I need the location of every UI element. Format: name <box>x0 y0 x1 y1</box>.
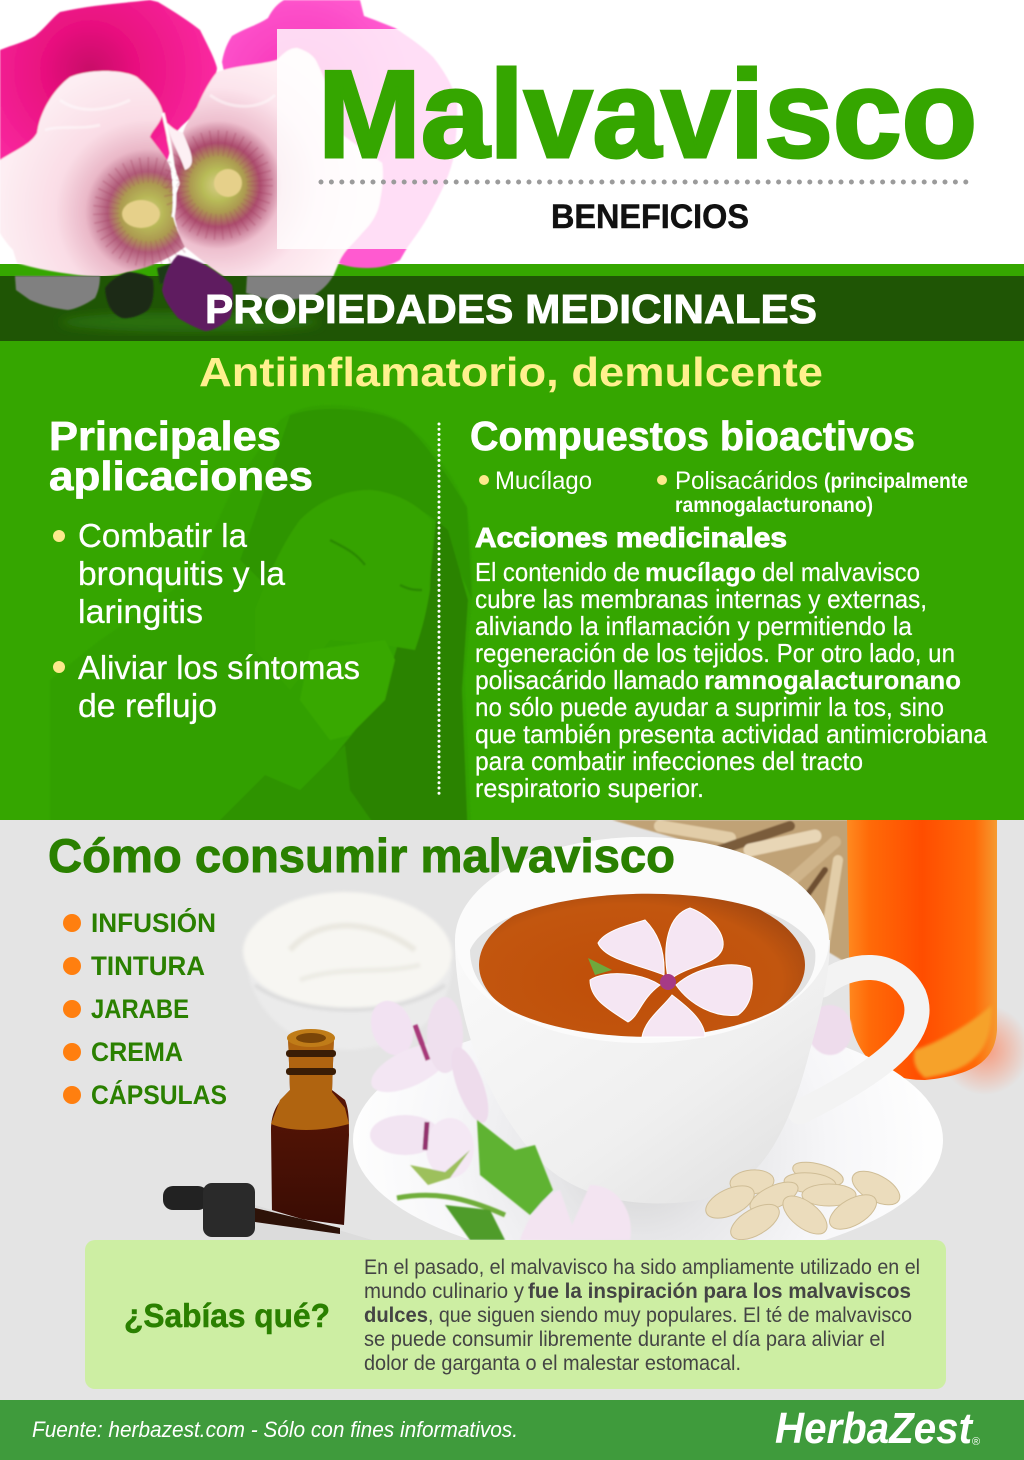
illustration: pale flowers on saucer <box>364 995 852 1185</box>
heading: principales aplicaciones: Principales <box>49 413 281 459</box>
subheading: properties: Antiinflamatorio, demulcente <box>199 349 823 395</box>
illustration: syrup bottle <box>847 820 1024 1095</box>
callout text: En el pasado, el malvavisco ha sido ampliamente utilizado en el <box>364 1256 920 1279</box>
illustration: cup handle <box>824 955 930 1084</box>
heading: compuestos bioactivos: Compuestos bioactivos <box>470 413 915 459</box>
callout text: dulces <box>364 1304 428 1327</box>
title: Malvavisco <box>318 46 977 184</box>
callout text: dolor de garganta o el malestar estomacal. <box>364 1352 741 1375</box>
list of applications: Aliviar los síntomas <box>78 649 360 686</box>
illustration: hollyhock flowers <box>0 0 457 277</box>
illustration: tea cup still life <box>163 820 1024 1265</box>
list of applications: de reflujo <box>78 687 217 724</box>
heading: acciones medicinales: Acciones medicinales <box>475 522 787 553</box>
paragraph: medicinal actions: para combatir infecciones del tracto <box>475 746 863 776</box>
list of applications: Combatir la <box>78 517 248 554</box>
logo: HerbaZest: ® <box>972 1436 980 1448</box>
callout heading: ¿Sabías qué? <box>124 1297 330 1334</box>
list: forms of consumption: CÁPSULAS <box>91 1079 227 1110</box>
dotted column divider <box>438 424 440 797</box>
paragraph: medicinal actions: polisacárido llamado <box>475 665 699 695</box>
list of applications <box>53 517 360 724</box>
compounds list <box>479 467 968 517</box>
illustration: flower floating in tea <box>588 908 752 1037</box>
compounds list: ramnogalacturonano) <box>675 494 873 517</box>
compounds list: (principalmente <box>824 470 968 493</box>
callout text: se puede consumir libremente durante el día para aliviar el <box>364 1328 885 1351</box>
callout text <box>364 1256 920 1375</box>
paragraph: medicinal actions: mucílago <box>645 557 756 587</box>
paragraph: medicinal actions: ramnogalacturonano <box>704 665 961 695</box>
illustration: leaf <box>397 1120 631 1240</box>
paragraph: medicinal actions: aliviando la inflamación y permitiendo la <box>475 611 913 641</box>
dotted title rule <box>321 180 975 184</box>
panel: principales aplicaciones <box>49 413 360 724</box>
illustration: coughing woman silhouette <box>220 408 472 820</box>
paragraph: medicinal actions: regeneración de los tejidos. Por otro lado, un <box>475 638 955 668</box>
panel: how to consume <box>0 820 1024 1400</box>
panel: compuestos bioactivos <box>470 413 988 803</box>
list of applications: bronquitis y la <box>78 555 286 592</box>
footer source text: Fuente: herbazest.com - Sólo con fines informativos. <box>32 1417 518 1442</box>
panel: main green section <box>0 341 1024 820</box>
list of applications: laringitis <box>78 593 203 630</box>
heading: principales aplicaciones <box>49 413 313 499</box>
list: forms of consumption <box>63 907 227 1110</box>
illustration: dried root pieces <box>612 820 850 965</box>
paragraph: medicinal actions <box>475 557 988 803</box>
subtitle: BENEFICIOS <box>551 198 749 236</box>
illustration: white cup <box>455 837 830 1203</box>
section band: green strip <box>0 264 1024 276</box>
heading: propiedades medicinales: PROPIEDADES MEDICINALES <box>205 286 817 332</box>
illustration: capsules <box>705 1162 900 1240</box>
illustration: amber tincture bottle <box>271 1029 349 1225</box>
compounds list: Mucílago <box>495 467 592 495</box>
list: forms of consumption: INFUSIÓN <box>91 907 216 938</box>
paragraph: medicinal actions: cubre las membranas internas y externas, <box>475 584 927 614</box>
callout text: mundo culinario y <box>364 1280 524 1303</box>
translucent panel behind title <box>277 29 507 249</box>
illustration: dropper <box>163 1183 340 1237</box>
illustration: flower buds and faded petals over band <box>15 255 333 332</box>
list: forms of consumption: CREMA <box>91 1037 183 1067</box>
paragraph: medicinal actions: del malvavisco <box>762 557 920 587</box>
compounds list: Polisacáridos <box>675 467 818 495</box>
logo: HerbaZest: HerbaZest <box>775 1404 974 1453</box>
heading: principales aplicaciones: aplicaciones <box>49 453 313 499</box>
illustration: saucer <box>353 1040 943 1240</box>
footer bar <box>0 1400 1024 1460</box>
illustration: bowl of cream <box>243 892 452 1008</box>
paragraph: medicinal actions: El contenido de <box>475 557 640 587</box>
paragraph: medicinal actions: que también presenta actividad antimicrobiana <box>475 719 988 749</box>
list: forms of consumption: TINTURA <box>91 951 205 981</box>
dark heading band <box>0 276 1024 341</box>
callout text: fue la inspiración para los malvaviscos <box>528 1280 911 1303</box>
callout: did you know <box>85 1240 946 1389</box>
callout text: , que siguen siendo muy populares. El té de malvavisco <box>428 1304 912 1327</box>
heading: cómo consumir: Cómo consumir malvavisco <box>48 829 675 882</box>
paragraph: medicinal actions: no sólo puede ayudar a suprimir la tos, sino <box>475 692 944 722</box>
illustration: tea surface <box>479 894 805 1037</box>
list: forms of consumption: JARABE <box>91 994 189 1024</box>
paragraph: medicinal actions: respiratorio superior. <box>475 773 704 803</box>
